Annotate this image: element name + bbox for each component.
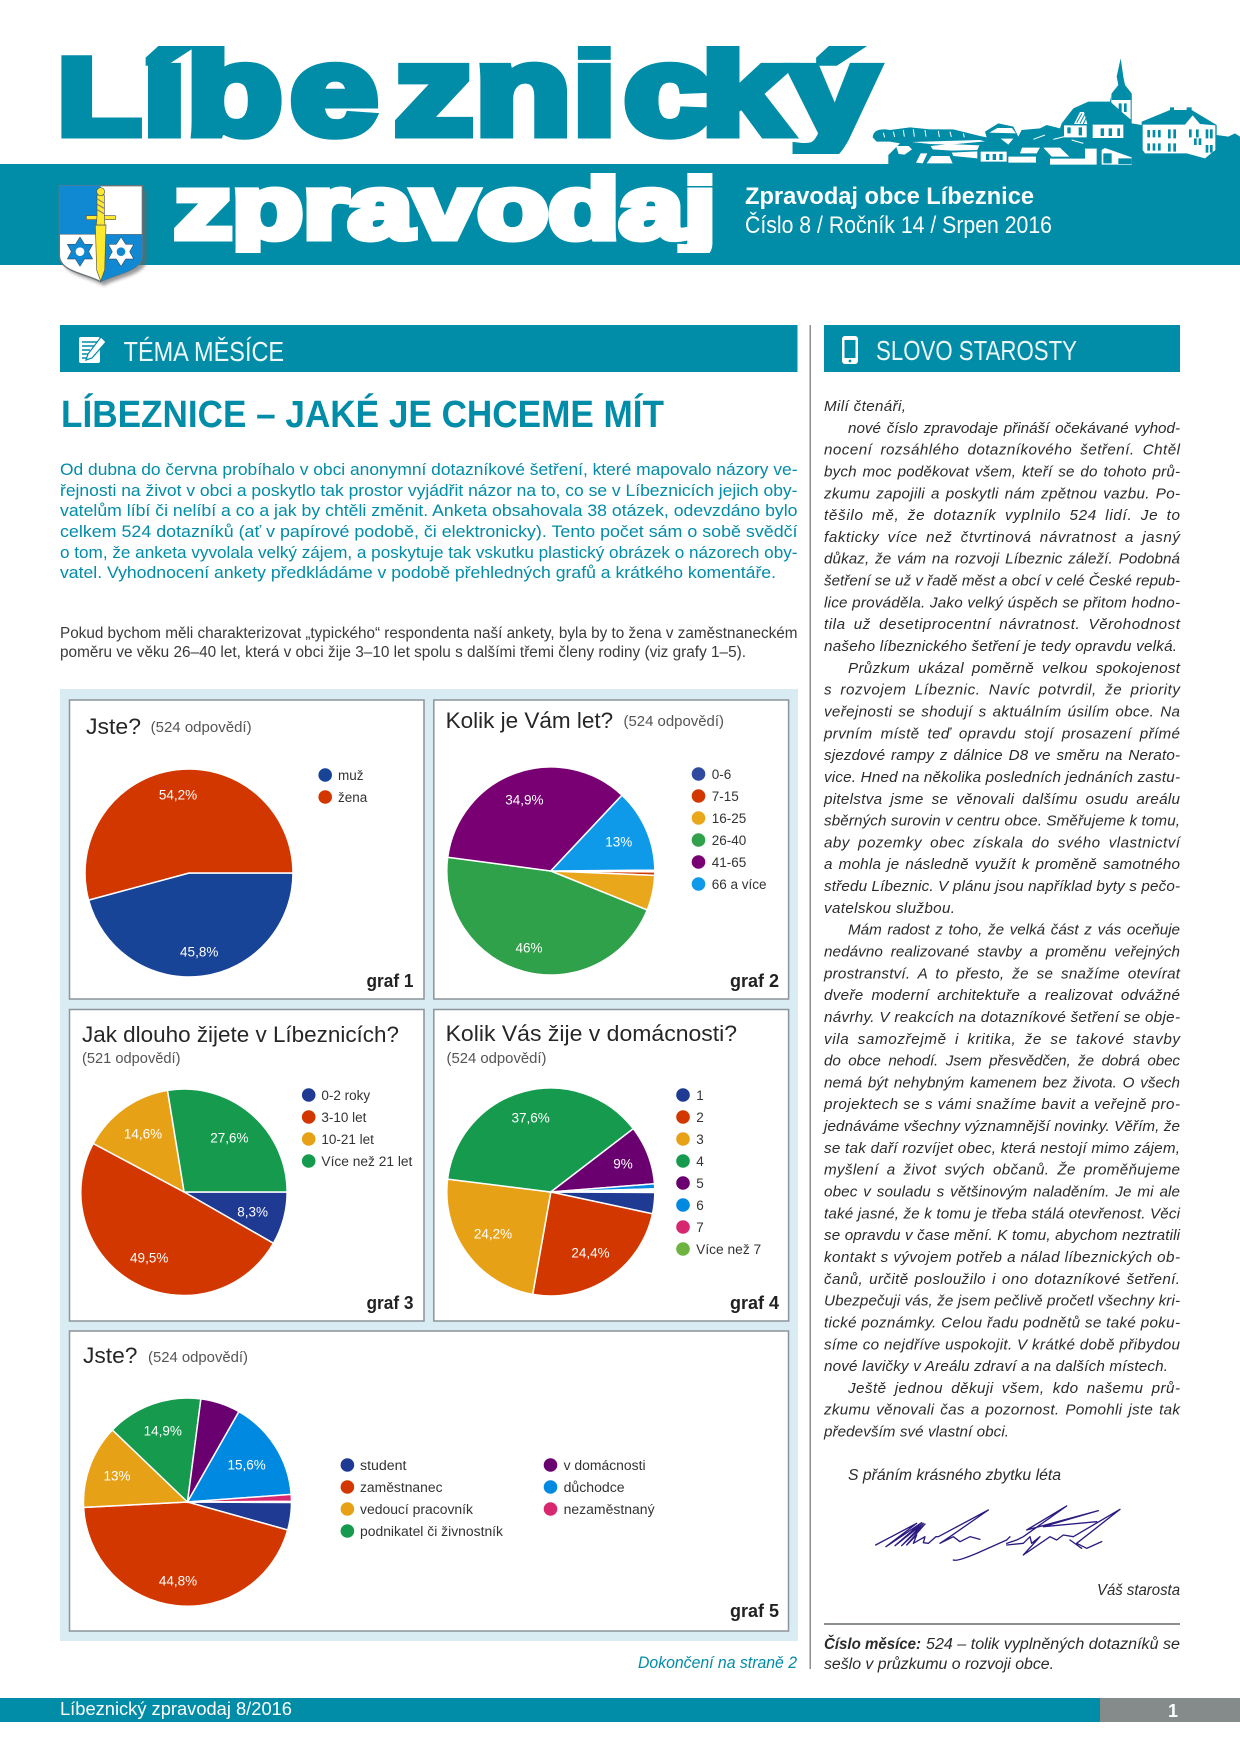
chart card: graf 5: 13% [103, 1468, 131, 1484]
chart card: graf 3: 14,6% [124, 1126, 162, 1142]
article: mayor's letter: obec v souladu s většinovým naladěním. Je mi ale [824, 1184, 1180, 1200]
article: mayor's letter [822, 398, 1182, 1440]
legend 3: 3-10 let [321, 1110, 367, 1125]
legend 5: vedoucí pracovník [360, 1502, 473, 1517]
chart card: graf 2: 46% [515, 940, 543, 956]
chart card: graf 4: Kolik Vás žije v domácnosti? [446, 1021, 737, 1046]
article: mayor's letter: Mám radost z toho, že velká část z vás oceňuje [848, 922, 1180, 939]
chart card: graf 2 [434, 700, 789, 999]
issue info: Číslo 8 / Ročník 14 / Srpen 2016 [745, 211, 1052, 239]
legend 5: student [360, 1458, 407, 1473]
legend 4 [676, 1088, 761, 1257]
article: mayor's letter: nocení rozsáhlého dotazníkového šetření. Chtěl [824, 442, 1181, 459]
chart card: graf 2: Kolik je Vám let? [446, 708, 613, 733]
chart card: graf 3 [70, 1010, 424, 1321]
chart card: graf 2: (524 odpovědí) [624, 714, 724, 730]
legend 2: 41-65 [712, 855, 746, 870]
article: mayor's letter: vila samozřejmě i kritika, že se takové stavby [824, 1031, 1181, 1048]
intro paragraph: vatelům líbí či nelíbí a co a jak by chtěli změnit. Anketa obsahovala 38 otázek, odevzdáno bylo [60, 501, 798, 520]
intro paragraph: Od dubna do června probíhalo v obci anonymní dotazníkové šetření, které mapovalo názory ve- [60, 460, 798, 479]
pie chart 1 [85, 769, 293, 977]
pie chart 5 [83, 1398, 291, 1606]
chart card: graf 5: 44,8% [159, 1574, 197, 1588]
article: mayor's letter: Ubezpečuji vás, že jsem pečlivě pročetl všechny kri- [824, 1293, 1180, 1310]
article: mayor's letter: zkumu věnovali čas a pozornost. Pomohli jste tak [823, 1402, 1181, 1419]
article: mayor's letter: tické poznámky. Celou řadu podnětů se také poku- [824, 1314, 1180, 1331]
article: mayor's letter: především své vlastní obci. [823, 1424, 1009, 1440]
second paragraph: poměru ve věku 26–40 let, která v obci žije 3–10 let spolu s dalšími třemi členy rodiny (viz grafy 1–5). [60, 644, 746, 661]
rule above number of the month [824, 1623, 1180, 1625]
legend 1: muž [338, 768, 364, 783]
article: mayor's letter: bych moc poděkovat všem, kteří se do tohoto prů- [824, 464, 1180, 480]
chart card: graf 2: graf 2 [730, 971, 779, 991]
legend 3: Více než 21 let [321, 1154, 413, 1169]
sign-off: Váš starosta [1097, 1582, 1180, 1599]
article: mayor's letter: Průzkum ukázal poměrně velkou spokojenost [848, 660, 1181, 677]
article: mayor's letter: nemá být nehybným kamenem bez života. O všech [824, 1074, 1180, 1091]
number of the month: Číslo měsíce: [824, 1635, 921, 1653]
legend 1 [318, 768, 368, 805]
intro paragraph: o tom, že anketa vyvolala velký zájem, a poskytuje tak vskutku plastický obrázek o názorech oby- [60, 543, 798, 562]
legend 2: 7-15 [712, 789, 739, 804]
legend 4: 3 [696, 1132, 704, 1147]
second paragraph: Pokud bychom měli charakterizovat „typického“ respondenta naší ankety, byla by to žena v zaměstnaneckém [60, 625, 798, 642]
number of the month: 524 – tolik vyplněných dotazníků se [926, 1636, 1180, 1653]
column divider [810, 325, 811, 1669]
legend 3 [302, 1088, 413, 1169]
chart card: graf 4: 24,2% [474, 1226, 512, 1242]
chart card: graf 2: 13% [605, 834, 632, 850]
chart card: graf 1: graf 1 [366, 971, 414, 991]
article: mayor's letter: sjezdové rampy z dálnice D8 ve směru na Nerato- [824, 747, 1180, 764]
chart card: graf 4: 24,4% [571, 1246, 610, 1260]
article: mayor's letter: se tak daří rozvíjet obec, která nestojí mimo zájem, [824, 1140, 1180, 1157]
legend 5: nezaměstnaný [564, 1502, 655, 1517]
article: mayor's letter: pitelstva jsme se věnovali dalšímu osudu areálu [823, 791, 1181, 808]
article: mayor's letter: projektech se s vámi snažíme bavit a veřejně pro- [823, 1096, 1180, 1113]
legend 2 [692, 767, 766, 892]
section header: Slovo starosty: SLOVO STAROSTY [876, 335, 1077, 366]
article: mayor's letter: kontakt s vývojem potřeb a nálad líbeznických ob- [824, 1249, 1180, 1266]
continuation note: Dokončení na straně 2 [638, 1653, 797, 1672]
legend 5 [341, 1458, 655, 1539]
chart card: graf 4: graf 4 [730, 1293, 779, 1313]
article: mayor's letter: Milí čtenáři, [824, 398, 906, 415]
second paragraph [60, 625, 798, 661]
section header: Slovo starosty [824, 325, 1180, 372]
chart card: graf 2: 34,9% [505, 792, 544, 808]
article: mayor's letter: zkumu zapojili a poskytli nám zpětnou vazbu. Po- [823, 485, 1180, 502]
article: mayor's letter: se opravdu v čase mění. K tomu, abychom neztratili [824, 1227, 1181, 1244]
chart card: graf 1: (524 odpovědí) [151, 720, 252, 736]
chart card: graf 5: graf 5 [730, 1601, 779, 1621]
legend 5: v domácnosti [564, 1458, 646, 1473]
chart card: graf 5 [70, 1331, 788, 1631]
chart card: graf 5: (524 odpovědí) [148, 1350, 248, 1366]
article: mayor's letter: nové číslo zpravodaje přináší očekávané vyhod- [848, 420, 1180, 437]
article: mayor's letter: tila už desetiprocentní návratnost. Věrohodnost [824, 616, 1181, 633]
legend 3: 0-2 roky [321, 1088, 370, 1103]
article: mayor's letter: myšlení a život svých občanů. Že proměňujeme [824, 1162, 1180, 1179]
chart card: graf 1: Jste? [86, 714, 141, 739]
legend 5: zaměstnanec [360, 1480, 443, 1495]
intro paragraph: celkem 524 dotazníků (ať v papírové podobě, či elektronicky). Tento počet sám o sobě svědčí [60, 522, 798, 541]
icon: note and pencil [79, 337, 106, 363]
chart card: graf 3: 27,6% [210, 1130, 249, 1146]
headline: LÍBEZNICE – JAKÉ JE CHCEME MÍT [61, 392, 664, 436]
article: mayor's letter: fakticky více než čtvrtinová návratnost a jasný [824, 529, 1181, 546]
article: mayor's letter: středu Líbeznic. V plánu jsou například byty s pečo- [824, 878, 1180, 895]
article: mayor's letter: Ještě jednou děkuji všem, kdo našemu prů- [847, 1380, 1180, 1397]
chart card: graf 4: 9% [613, 1156, 633, 1172]
chart card: graf 1: 45,8% [180, 944, 218, 960]
signature [876, 1506, 1120, 1560]
legend 5: podnikatel či živnostník [360, 1524, 503, 1539]
article: mayor's letter: důkaz, že vám na rozvoji Líbeznic záleží. Podobná [824, 551, 1180, 568]
intro paragraph [60, 460, 798, 582]
chart card: graf 1 [70, 700, 424, 999]
issue info [745, 183, 1052, 239]
chart card: graf 5: Jste? [83, 1343, 138, 1368]
section header: Téma měsíce: TÉMA MĚSÍCE [124, 336, 284, 367]
masthead subtitle: zpravodaj: zpravodaj [174, 157, 716, 257]
emblem: coat of arms [59, 186, 147, 286]
article: mayor's letter: jednáváme všechny významnější novinky. Věřím, že [822, 1118, 1180, 1135]
legend 4: 6 [696, 1198, 704, 1213]
chart card: graf 3: 49,5% [130, 1250, 168, 1266]
pie chart 4 [447, 1088, 655, 1296]
closing line: S přáním krásného zbytku léta [848, 1467, 1061, 1484]
legend 5: důchodce [564, 1480, 625, 1495]
legend 2: 66 a více [712, 877, 766, 892]
chart card: graf 3: Jak dlouho žijete v Líbeznicích? [82, 1022, 399, 1047]
illustration: town skyline [873, 58, 1240, 165]
chart card: graf 3: graf 3 [366, 1293, 414, 1313]
chart card: graf 5: 14,9% [144, 1424, 182, 1438]
article: mayor's letter: aby pozemky obec získala do svého vlastnictví [824, 834, 1182, 851]
legend 3: 10-21 let [321, 1132, 374, 1147]
masthead title: Líbeznický: L [58, 36, 140, 157]
footer bar: Líbeznický zpravodaj 8/2016 [60, 1699, 292, 1719]
masthead title: Líbeznický: íbeznický [142, 21, 878, 161]
pie chart 2 [447, 767, 655, 975]
article: mayor's letter: veřejnosti se shodují s aktuálním úsilím obce. Na [824, 704, 1180, 720]
legend 2: 26-40 [712, 833, 746, 848]
article: mayor's letter: prostranství. A to přesto, že se snažíme otevírat [823, 965, 1181, 982]
article: mayor's letter: návrhy. V reakcích na dotazníkové šetření se obje- [824, 1009, 1180, 1026]
article: mayor's letter: lice prováděla. Jako velký úspěch se přitom hodno- [824, 594, 1180, 611]
article: mayor's letter: šetření se už v řadě měst a obcí v celé České repub- [824, 573, 1180, 590]
article: mayor's letter: nedávno realizované stavby a proměnu veřejných [824, 944, 1180, 960]
footer bar [0, 1698, 1240, 1722]
article: mayor's letter: do obce nehodí. Jsem přesvědčen, že dobrá obec [824, 1053, 1180, 1070]
legend 4: 1 [696, 1088, 704, 1103]
article: mayor's letter: prvním místě teď opravdu stojí prosazení přímé [823, 725, 1180, 742]
icon: phone [842, 336, 858, 364]
footer bar: 1 [1168, 1701, 1178, 1721]
article: mayor's letter: vice. Hned na několika posledních jednáních zastu- [824, 769, 1180, 786]
article: mayor's letter: vatelskou službou. [824, 900, 955, 917]
pie chart 3 [81, 1089, 287, 1296]
chart card: graf 3: (521 odpovědí) [82, 1051, 180, 1067]
article: mayor's letter: síme co nejdříve uspokojit. V krátké době přibydou [824, 1336, 1181, 1353]
section header: Téma měsíce [60, 325, 798, 372]
chart card: graf 3: 8,3% [237, 1204, 268, 1220]
article: mayor's letter: dveře moderní architektuře a realizovat odvážné [824, 987, 1180, 1004]
legend 1: žena [338, 790, 368, 805]
article: mayor's letter: a mohla je následně využít k proměně samotného [824, 856, 1180, 873]
chart card: graf 4: (524 odpovědí) [446, 1051, 546, 1067]
legend 2: 16-25 [712, 811, 746, 826]
article: mayor's letter: těšilo mě, že dotazník vyplnilo 524 lidí. Je to [824, 507, 1180, 524]
intro paragraph: řejnosti na život v obci a poskytlo tak prostor vyjádřit názor na to, co se v Líbeznicích jejich oby- [60, 481, 798, 500]
legend 4: 7 [696, 1220, 704, 1235]
chart card: graf 4 [434, 1010, 789, 1321]
article: mayor's letter: našeho líbeznického šetření je tedy opravdu velká. [824, 638, 1177, 655]
number of the month: sešlo v průzkumu o rozvoji obce. [824, 1656, 1054, 1673]
legend 4: 5 [696, 1176, 704, 1191]
legend 4: 2 [696, 1110, 704, 1125]
article: mayor's letter: nové lavičky v Areálu zdraví a na dalších místech. [824, 1358, 1168, 1375]
panel: charts [60, 689, 798, 1641]
article: mayor's letter: s rozvojem Líbeznic. Navíc potvrdil, že priority [824, 682, 1181, 699]
legend 4: Více než 7 [696, 1242, 761, 1257]
intro paragraph: vatel. Vyhodnocení ankety předkládáme v podobě přehledných grafů a krátkého komentáře. [60, 563, 776, 582]
chart card: graf 5: 15,6% [227, 1458, 266, 1472]
article: mayor's letter: sběrných surovin v centru obce. Směřujeme k tomu, [824, 813, 1180, 830]
chart card: graf 1: 54,2% [159, 788, 197, 802]
article: mayor's letter: také jasné, že k tomu je třeba stálá otevřenost. Věci [824, 1205, 1181, 1222]
chart card: graf 4: 37,6% [511, 1110, 550, 1126]
issue info: Zpravodaj obce Líbeznice [745, 183, 1034, 210]
legend 4: 4 [696, 1154, 704, 1169]
number of the month [824, 1635, 1180, 1673]
article: mayor's letter: čanů, určitě posloužilo i ono dotazníkové šetření. [824, 1271, 1180, 1288]
legend 2: 0-6 [712, 767, 731, 782]
masthead band [0, 164, 1240, 265]
